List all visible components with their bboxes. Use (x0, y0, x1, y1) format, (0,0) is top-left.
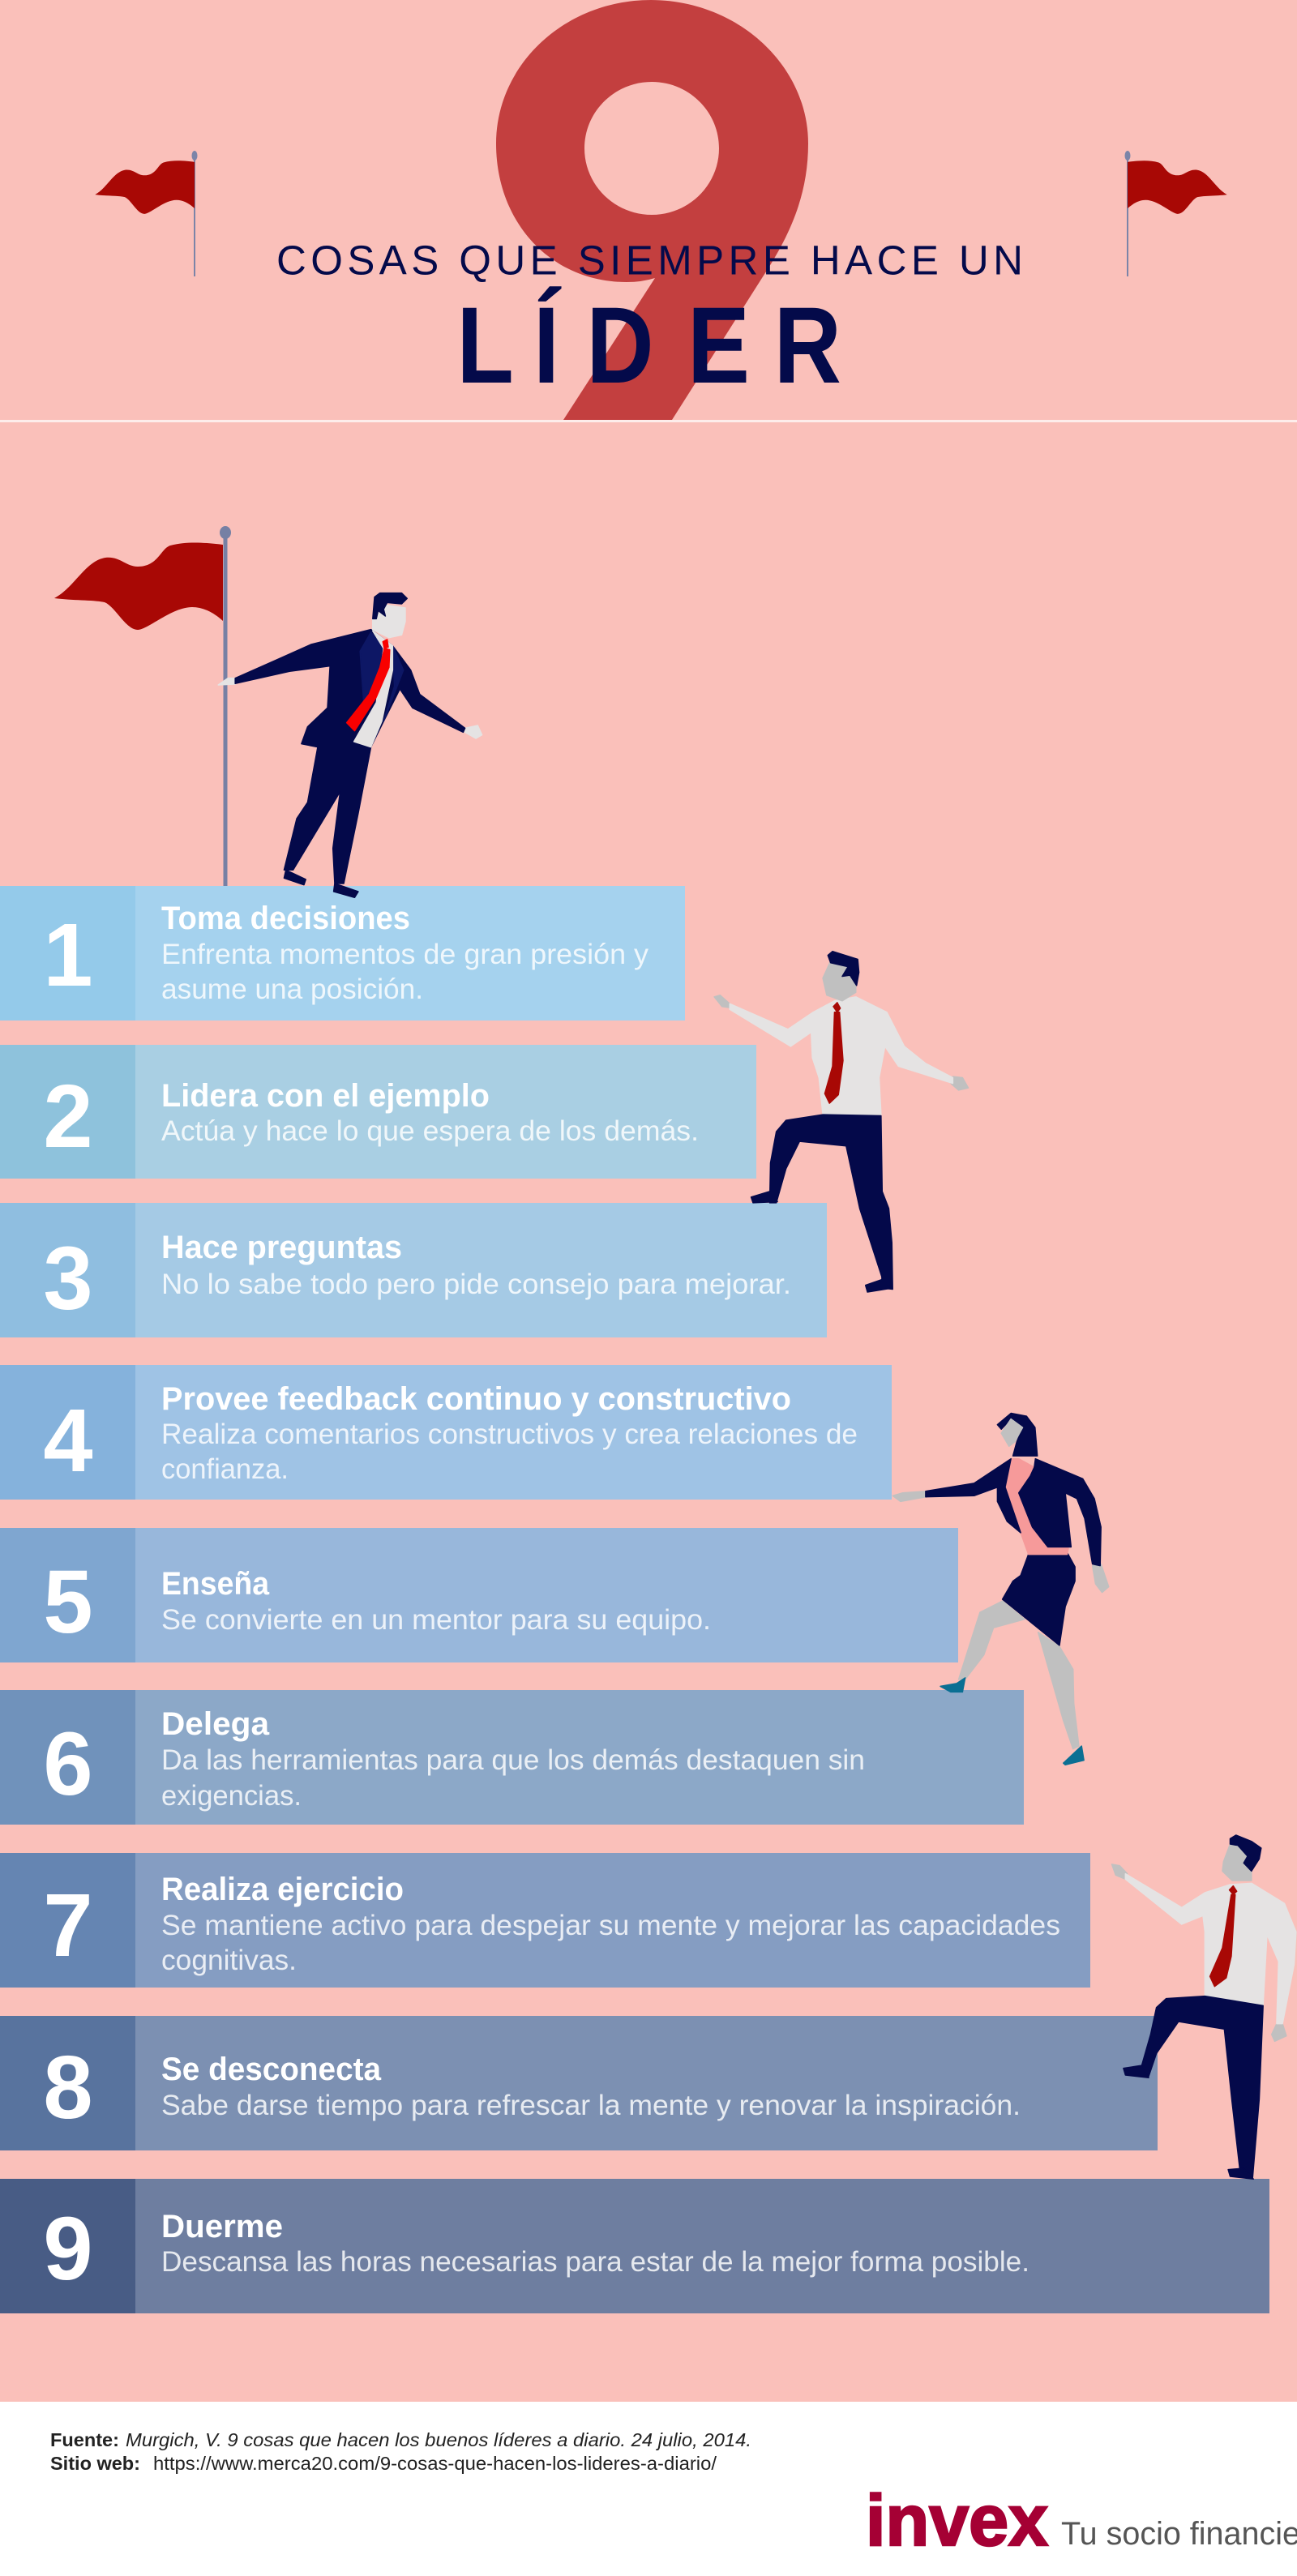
number 4: 4 (43, 1391, 93, 1491)
description 4 (161, 1419, 858, 1485)
description 6 (161, 1744, 865, 1812)
step 8 (0, 2016, 1158, 2150)
step 4 (0, 1365, 892, 1500)
description 6: exigencias. (161, 1780, 302, 1812)
description 7 (161, 1910, 1060, 1976)
description 7: Se mantiene activo para despejar su mente y mejorar las capacidades (161, 1910, 1060, 1941)
figure: woman climbing (892, 1414, 1109, 1765)
description 4: Realiza comentarios constructivos y crea relaciones de (161, 1419, 858, 1450)
heading 8: Se desconecta (161, 2052, 382, 2087)
heading 7: Realiza ejercicio (161, 1872, 404, 1907)
heading 1: Toma decisiones (161, 901, 410, 936)
figure: man at the top with flag (218, 593, 482, 897)
large flag (54, 526, 231, 886)
right small flag (1125, 151, 1227, 276)
description 4: confianza. (161, 1453, 289, 1485)
number 5: 5 (43, 1552, 93, 1652)
header rule (0, 420, 1297, 422)
number 9: 9 (43, 2199, 93, 2299)
left small flag (95, 151, 198, 276)
description 9: Descansa las horas necesarias para estar de la mejor forma posible. (161, 2246, 1029, 2278)
title line two: LÍDER (456, 285, 841, 406)
source citation: Sitio web: (50, 2453, 140, 2474)
source citation: Murgich, V. 9 cosas que hacen los buenos líderes a diario. 24 julio, 2014. (126, 2429, 751, 2450)
description 3: No lo sabe todo pero pide consejo para mejorar. (161, 1269, 791, 1300)
number 1: 1 (43, 905, 93, 1005)
heading 4: Provee feedback continuo y constructivo (161, 1381, 791, 1417)
step 5 (0, 1528, 958, 1662)
step 1 (0, 886, 685, 1021)
description 1: asume una posición. (161, 973, 423, 1005)
number 6: 6 (43, 1714, 93, 1814)
heading 9: Duerme (161, 2209, 283, 2244)
description 2: Actúa y hace lo que espera de los demás. (161, 1115, 699, 1147)
heading 5: Enseña (161, 1566, 270, 1602)
description 8: Sabe darse tiempo para refrescar la mente y renovar la inspiración. (161, 2090, 1021, 2121)
heading 6: Delega (161, 1706, 270, 1742)
figure: man in white shirt climbing (714, 952, 969, 1292)
heading 3: Hace preguntas (161, 1230, 402, 1265)
step 6 (0, 1690, 1024, 1825)
step 9 (0, 2179, 1269, 2313)
description 1 (161, 939, 649, 1005)
heading 2: Lidera con el ejemplo (161, 1078, 490, 1114)
step 3 (0, 1203, 827, 1337)
invex logo (866, 2480, 1297, 2561)
number 7: 7 (43, 1876, 93, 1975)
big number nine (496, 0, 808, 420)
step 2 (0, 1045, 756, 1179)
step 7 (0, 1853, 1090, 1988)
source citation (50, 2429, 751, 2474)
source citation: Fuente: (50, 2429, 119, 2450)
description 1: Enfrenta momentos de gran presión y (161, 939, 649, 970)
footer panel (0, 2402, 1297, 2576)
invex logo: invex (866, 2480, 1048, 2561)
number 2: 2 (43, 1067, 93, 1166)
description 6: Da las herramientas para que los demás destaquen sin (161, 1744, 865, 1776)
description 7: cognitivas. (161, 1945, 297, 1976)
figure: man on the last step (1112, 1835, 1296, 2179)
number 3: 3 (43, 1229, 93, 1329)
source citation: https://www.merca20.com/9-cosas-que-hacen-los-lideres-a-diario/ (153, 2453, 717, 2474)
logo tagline: Tu socio financie (1061, 2516, 1297, 2552)
title line one: COSAS QUE SIEMPRE HACE UN (276, 237, 1023, 284)
description 5: Se convierte en un mentor para su equipo. (161, 1604, 711, 1636)
number 8: 8 (43, 2038, 93, 2137)
